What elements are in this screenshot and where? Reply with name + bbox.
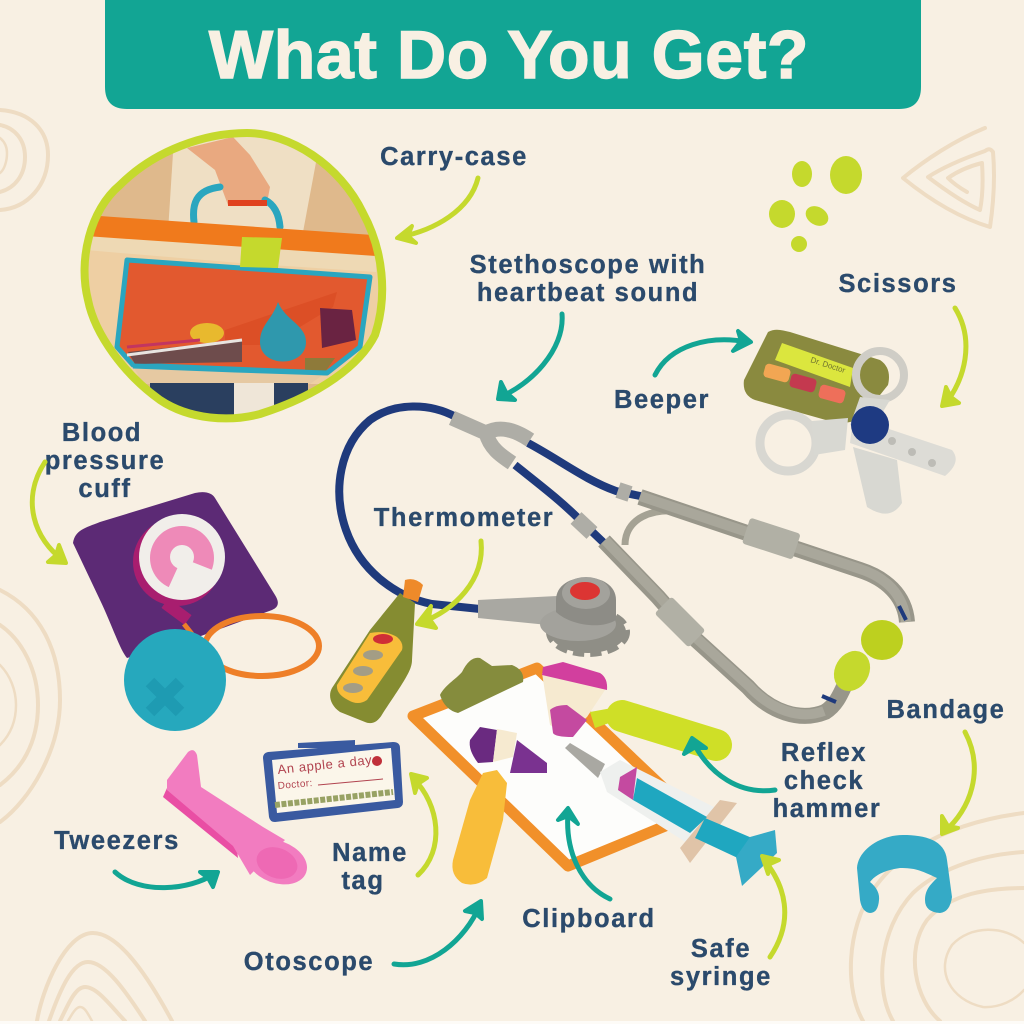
label: beeper — [614, 331, 751, 414]
icon: scissors — [760, 351, 956, 514]
title: What Do You Get? — [209, 17, 809, 93]
label: carry-case: Carry-case — [380, 143, 528, 171]
label: tweezers: Tweezers — [54, 827, 180, 855]
label: bandage — [887, 696, 1005, 834]
icon: clipboard — [413, 658, 692, 866]
icon: bandage — [857, 835, 952, 913]
label: blood pressure cuff: Blood — [62, 419, 142, 447]
label: blood pressure cuff: cuff — [78, 475, 132, 503]
label: name tag — [332, 774, 436, 895]
icon: beeper: Dr. Doctor — [809, 355, 847, 375]
label: carry-case — [380, 143, 528, 243]
label: safe syringe — [670, 856, 785, 991]
label: reflex check hammer — [684, 738, 881, 823]
label: safe syringe: Safe — [691, 935, 751, 963]
label: stethoscope: heartbeat sound — [477, 279, 699, 307]
label: scissors — [838, 270, 966, 406]
header banner — [105, 0, 921, 109]
label: otoscope — [244, 901, 482, 976]
icon: name tag: An apple a day — [277, 752, 373, 777]
icon: tweezers — [163, 750, 313, 892]
label: name tag: tag — [341, 867, 385, 895]
label: tweezers — [54, 827, 218, 888]
icon: name tag — [263, 740, 403, 822]
icon: otoscope — [452, 727, 547, 885]
label: thermometer: Thermometer — [374, 504, 554, 532]
label: otoscope: Otoscope — [244, 948, 374, 976]
panel: carry-case photo — [80, 130, 390, 425]
label: stethoscope: Stethoscope with — [470, 251, 706, 279]
label: beeper: Beeper — [614, 386, 710, 414]
icon: thermometer — [330, 579, 423, 723]
label: name tag: Name — [332, 839, 408, 867]
icon: reflex check hammer — [542, 662, 716, 745]
label: reflex check hammer: hammer — [773, 795, 881, 823]
icon: blood pressure cuff — [73, 492, 319, 731]
label: scissors: Scissors — [838, 270, 958, 298]
icon: name tag: Doctor: — [277, 778, 313, 792]
label: stethoscope — [470, 251, 706, 400]
icon: safe syringe — [565, 743, 777, 886]
icon: stethoscope — [339, 406, 907, 716]
label: clipboard — [522, 808, 656, 933]
label: reflex check hammer: Reflex — [781, 739, 867, 767]
label: safe syringe: syringe — [670, 963, 772, 991]
label: bandage: Bandage — [887, 696, 1005, 724]
label: reflex check hammer: check — [784, 767, 864, 795]
label: clipboard: Clipboard — [522, 905, 656, 933]
label: thermometer — [374, 504, 554, 628]
label: blood pressure cuff — [32, 419, 165, 563]
icon: beeper — [744, 330, 889, 424]
icon: lime dots — [769, 156, 862, 252]
label: blood pressure cuff: pressure — [45, 447, 165, 475]
